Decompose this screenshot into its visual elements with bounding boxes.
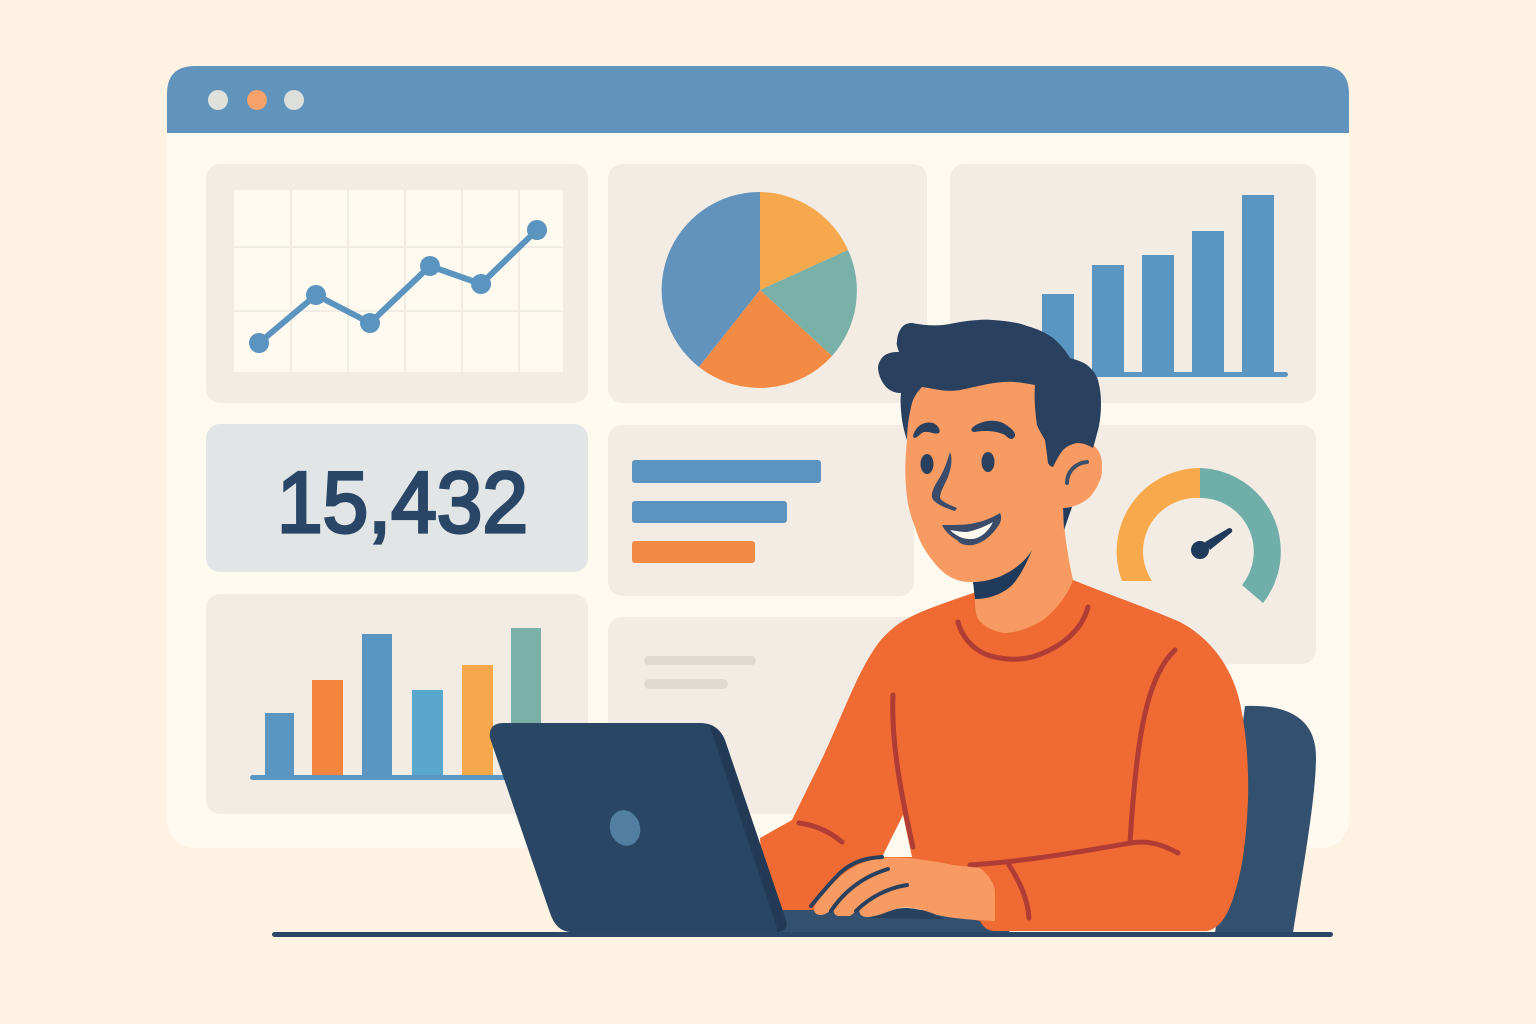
panel: text placeholder (608, 617, 938, 814)
browser window (167, 66, 1349, 848)
hand (811, 857, 995, 921)
keyboard shadow (870, 908, 945, 919)
nose (932, 452, 957, 511)
beard shadow (973, 550, 1032, 599)
keyboard base (770, 910, 1010, 933)
window control dots (208, 90, 304, 110)
gauge needle (1191, 528, 1232, 559)
line series (249, 220, 547, 353)
panel: KPI number (206, 424, 588, 572)
neck shadow (1063, 507, 1072, 530)
chair (1215, 706, 1316, 933)
person (760, 320, 1248, 931)
hair (878, 320, 1101, 467)
sweater (760, 580, 1248, 931)
table edge (272, 932, 1333, 937)
panel: line chart (206, 164, 588, 403)
eyes (920, 452, 994, 474)
finger lines (811, 857, 907, 911)
laptop lid side (690, 723, 787, 932)
gauge arcs (1117, 468, 1281, 603)
laptop logo (605, 806, 645, 850)
KPI value: 15,432 (277, 455, 528, 551)
palm and fingers (814, 857, 995, 921)
ear (1050, 435, 1102, 508)
panel: bar chart top right (950, 164, 1316, 403)
title bar (167, 66, 1349, 133)
neck (975, 490, 1073, 633)
inner ear (1067, 462, 1087, 483)
laptop (490, 723, 787, 932)
panel: multicolour bar chart (206, 594, 588, 814)
panel: gauge (1050, 425, 1316, 664)
face (905, 375, 1064, 582)
window body (167, 66, 1349, 848)
panel: pie chart (608, 164, 927, 403)
mouth (942, 513, 1001, 545)
panel: horizontal bars (608, 425, 914, 596)
laptop lid (490, 723, 777, 932)
pie slices (662, 192, 857, 388)
sweater seams (799, 607, 1178, 918)
underarm gap (882, 815, 912, 857)
eyebrows (913, 421, 1015, 439)
